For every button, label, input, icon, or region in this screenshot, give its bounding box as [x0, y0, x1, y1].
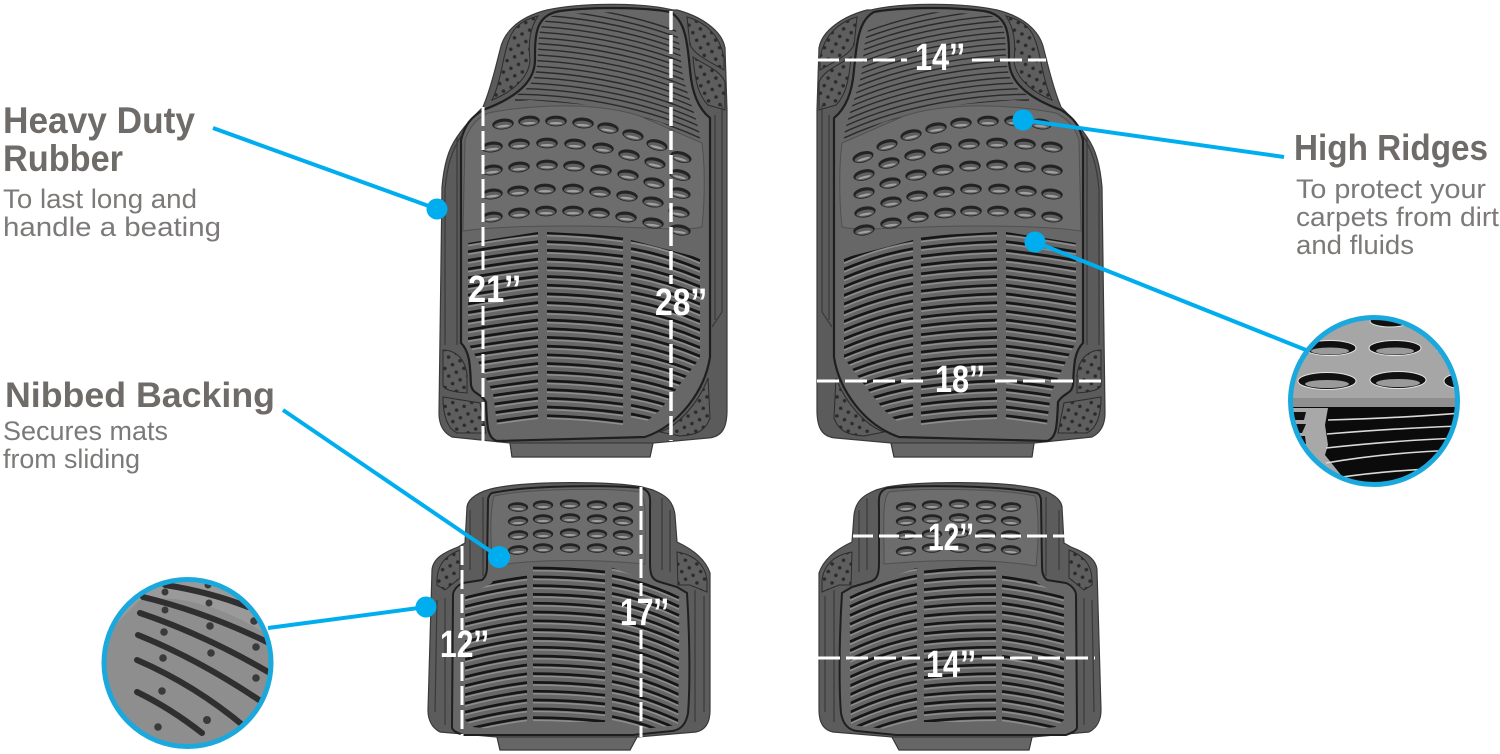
raised ovals: [481, 115, 693, 237]
text: to protect: [1296, 174, 1500, 260]
zoom circle: nibbed backing detail: [100, 575, 276, 752]
text: secures mats: [3, 416, 168, 474]
shoulder tread panels: [443, 16, 725, 436]
dimension: 28 inch: 28’’: [655, 282, 707, 324]
main panel: [452, 486, 689, 735]
callout: nibbed backing: [3, 376, 510, 568]
rear tab: [497, 737, 637, 750]
dimension: 17 inch: 17’’: [620, 592, 669, 634]
text: to last long: [3, 184, 221, 242]
mat outline: [439, 4, 727, 457]
side grooves: [445, 105, 722, 345]
text: secures mats: Secures mats: [3, 416, 168, 446]
callout: high ridges: [1012, 110, 1500, 260]
text: to last long: handle a beating: [3, 212, 221, 242]
lower ridges: [465, 567, 679, 741]
oval panel: [463, 106, 704, 231]
dimension: 21 inch: 21’’: [468, 269, 521, 311]
text: to protect: To protect your: [1296, 174, 1486, 204]
dimension: 18 inch: 18’’: [935, 359, 985, 401]
heading: heavy duty rubber: Rubber: [3, 138, 123, 179]
shoulder tread panels: [437, 550, 707, 592]
mat: rear right: [819, 483, 1101, 750]
side grooves: [435, 497, 704, 725]
dimension: 14 inch top: 14’’: [915, 37, 965, 79]
mat: front left: [439, 3, 727, 457]
main panel: [461, 8, 710, 441]
callout line: nib detail: [268, 596, 436, 628]
heading: nibbed backing: Nibbed Backing: [5, 376, 275, 415]
raised ovals: [507, 499, 634, 556]
text: to last long: To last long and: [3, 184, 197, 214]
oval panel: [491, 489, 645, 566]
text: secures mats: from sliding: [3, 444, 140, 474]
mat outline: [428, 483, 710, 750]
zoom circle: high ridges detail: [1288, 315, 1460, 487]
top ridges: [515, 3, 700, 138]
dimension: 12 inch top: 12’’: [928, 517, 974, 559]
text: to protect: carpets from dirt: [1296, 202, 1500, 232]
heading: high ridges: High Ridges: [1294, 127, 1488, 168]
heading: heavy duty rubber: Heavy Duty: [3, 100, 195, 141]
rear tab: [510, 443, 653, 457]
heading: heavy duty rubber: [3, 100, 195, 179]
lower ridges: [468, 233, 701, 438]
mat: rear left: [428, 483, 710, 750]
dimension: 14 inch bottom: 14’’: [926, 644, 976, 686]
mat: front right: [817, 3, 1105, 457]
callout: heavy duty rubber: [3, 100, 448, 242]
callout line: ridge detail: [1024, 232, 1306, 350]
dimension: 12 inch left: 12’’: [440, 624, 489, 666]
text: to protect: and fluids: [1296, 230, 1414, 260]
